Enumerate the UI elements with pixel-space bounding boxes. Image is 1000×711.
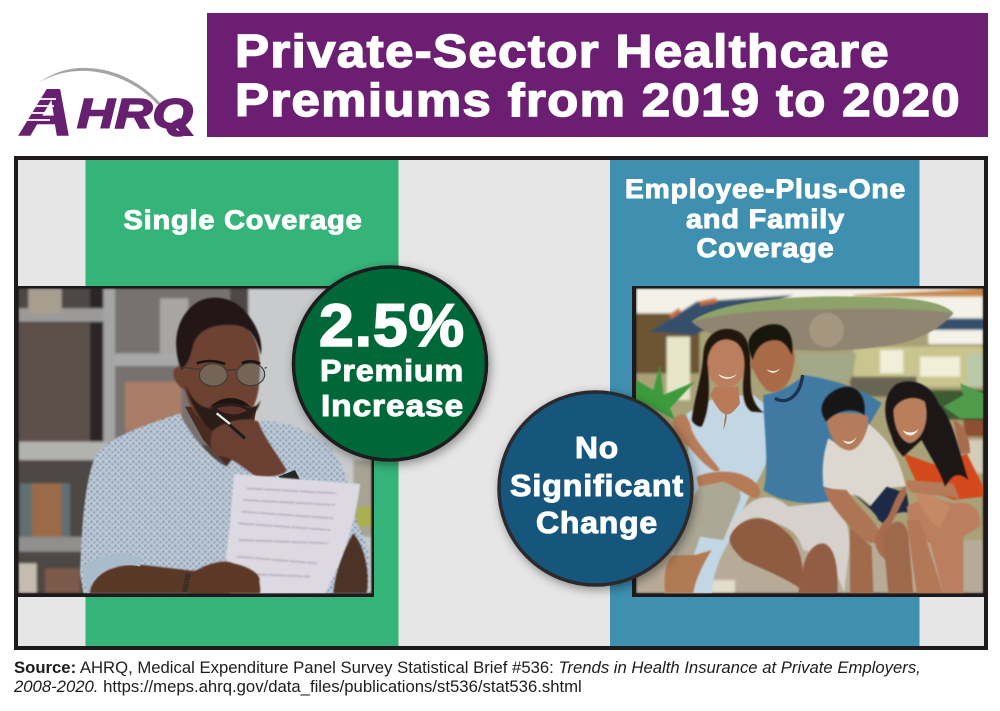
boy	[823, 423, 906, 510]
callout: 2.5% premium increase: Increase	[321, 388, 464, 423]
plant leaves	[636, 365, 695, 420]
logo: AHRQ	[19, 68, 194, 149]
heading: family coverage	[625, 174, 906, 263]
man	[763, 375, 882, 503]
document	[226, 474, 360, 593]
face	[173, 323, 260, 430]
callout: no significant change: Change	[536, 505, 658, 540]
heading: single coverage: Single Coverage	[124, 205, 362, 235]
neck	[185, 407, 257, 465]
heading: family coverage: and Family	[686, 204, 845, 234]
panel: single coverage column	[86, 160, 398, 646]
title banner	[207, 13, 988, 137]
beard	[185, 385, 261, 433]
hand	[211, 419, 287, 477]
callout: no significant change	[499, 392, 692, 585]
woman head	[707, 338, 745, 386]
photo: family at fountain	[632, 286, 987, 597]
logo wordmark: HRQ	[77, 90, 193, 138]
man head	[750, 336, 795, 392]
callout: no significant change: No	[575, 430, 619, 465]
hair	[176, 298, 261, 370]
shirt	[80, 413, 370, 593]
title banner: Premiums from 2019 to 2020	[235, 74, 961, 126]
callout: 2.5% premium increase: Premium	[320, 353, 464, 388]
heading: family coverage: Employee-Plus-One	[625, 174, 906, 204]
hand with document	[190, 562, 260, 593]
main panel	[16, 158, 986, 648]
panel: family coverage column	[610, 160, 920, 646]
heading: family coverage: Coverage	[696, 233, 834, 263]
glasses	[199, 363, 265, 386]
arm	[90, 565, 260, 593]
fountain	[692, 298, 953, 351]
source note: 2008-2020. https://meps.ahrq.gov/data_files/publications/st536/stat536.shtml	[13, 677, 582, 696]
source note	[13, 658, 921, 696]
girl	[953, 420, 970, 453]
callout: 2.5% premium increase: 2.5%	[319, 292, 465, 359]
logo wordmark	[19, 75, 193, 149]
callout: 2.5% premium increase	[294, 267, 486, 460]
source note: Source: AHRQ, Medical Expenditure Panel Survey Statistical Brief #536: Trends in Health Insurance at Private Employers,	[14, 658, 921, 677]
callout: no significant change: Significant	[510, 468, 684, 503]
photo: man reading document	[16, 286, 374, 597]
title: Private-Sector Healthcare	[235, 25, 890, 77]
woman	[665, 395, 777, 593]
logo arc	[38, 68, 163, 106]
logo wordmark: A	[19, 75, 73, 149]
